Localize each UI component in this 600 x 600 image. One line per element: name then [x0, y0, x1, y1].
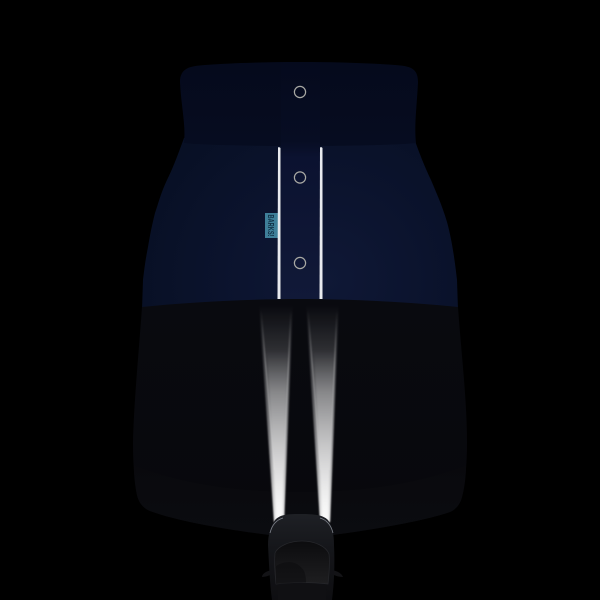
reflective strip left	[278, 147, 280, 299]
reflective strip right	[320, 147, 322, 299]
headlight beam left	[259, 305, 293, 522]
coat centre placket	[281, 63, 320, 301]
car mirror right	[331, 570, 343, 577]
headlight beam right	[306, 305, 339, 522]
car windshield	[275, 541, 329, 584]
snap button middle	[294, 172, 306, 183]
coat collar	[180, 62, 418, 146]
snap button top	[294, 86, 306, 98]
car headlight trim left	[270, 518, 283, 533]
brand label: BARKS!	[266, 214, 276, 237]
coat hem band	[134, 466, 466, 535]
coat upper body	[142, 138, 458, 310]
car roof	[277, 584, 327, 600]
brand label	[265, 213, 278, 238]
car headlight trim right	[320, 518, 333, 533]
car windshield shadow	[276, 562, 306, 584]
car body	[268, 514, 334, 600]
car mirror left	[262, 570, 273, 577]
snap button bottom	[294, 257, 306, 269]
coat lower section	[133, 299, 467, 535]
coat	[133, 62, 467, 535]
car	[262, 514, 343, 600]
